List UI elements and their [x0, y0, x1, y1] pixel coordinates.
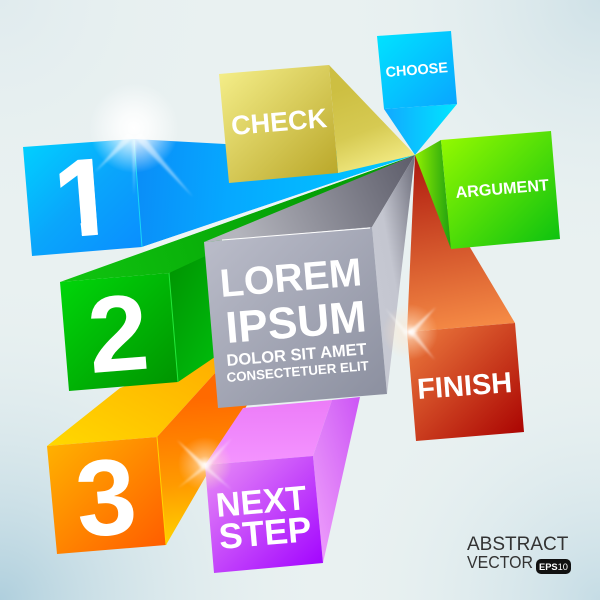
logo: abstract vector: ABSTRACT	[467, 534, 569, 555]
block: finish	[407, 155, 524, 441]
block: choose	[377, 31, 457, 155]
block: next step	[205, 397, 360, 573]
block: number 2	[60, 155, 415, 396]
light flare: finish block	[382, 304, 438, 360]
main text: DOLOR SIT AMET	[226, 340, 367, 370]
badge: eps10: EPS10	[539, 562, 568, 573]
main text	[218, 250, 369, 385]
label: choose: CHOOSE	[385, 60, 449, 81]
logo: abstract vector: VECTOR	[467, 552, 533, 572]
main text: LOREM	[218, 250, 363, 306]
block: number 1	[23, 135, 415, 260]
block: argument	[415, 131, 560, 249]
label: next step	[214, 479, 313, 557]
main text: IPSUM	[224, 292, 368, 353]
label: check: CHECK	[230, 103, 329, 141]
light flare: next step block	[177, 437, 232, 491]
light flare: blue block	[89, 83, 193, 197]
number 2: 2	[83, 271, 153, 396]
number 3: 3	[71, 435, 141, 560]
main block: lorem ipsum	[204, 155, 415, 408]
label: next step: STEP	[217, 509, 313, 557]
label: argument: ARGUMENT	[455, 176, 550, 202]
block: number 3	[47, 355, 250, 560]
label: finish: FINISH	[416, 367, 513, 406]
main text: CONSECTETUER ELIT	[226, 358, 369, 385]
logo: abstract vector	[467, 534, 571, 574]
number 1: 1	[50, 135, 120, 260]
block: check	[219, 65, 415, 183]
white gap between blue and green	[142, 155, 415, 251]
label: next step: NEXT	[214, 479, 308, 525]
